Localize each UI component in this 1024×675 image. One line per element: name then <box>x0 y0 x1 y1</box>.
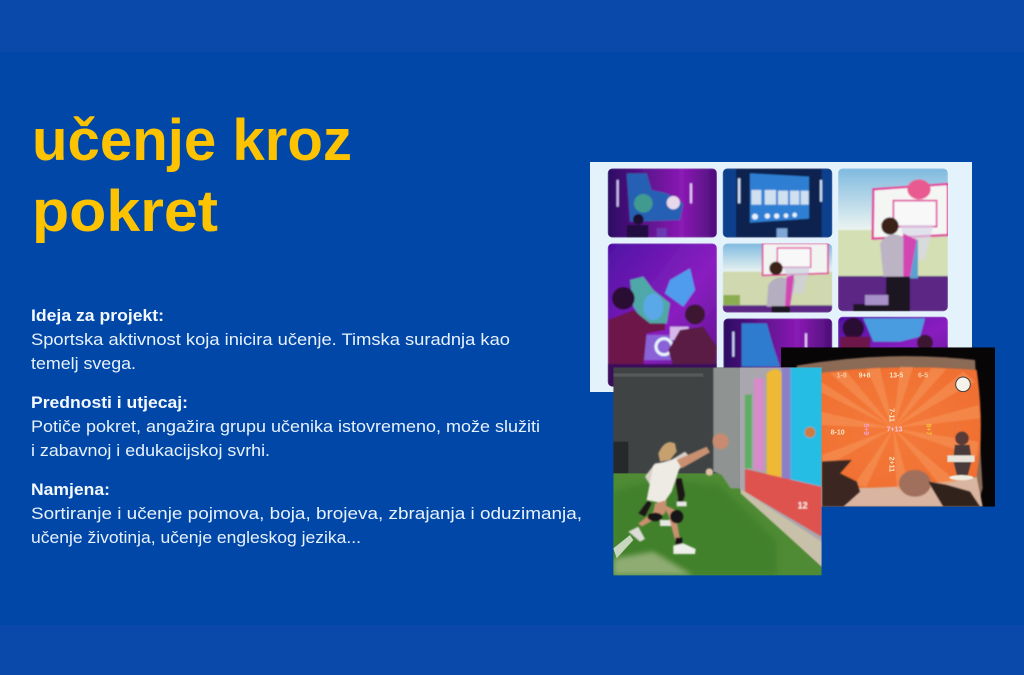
title <box>32 108 352 244</box>
text block: advantages and impact: Prednosti i utjecaj: <box>31 394 188 412</box>
photo: orange number game projection <box>781 347 995 507</box>
game numbers: 9+8 <box>859 373 871 380</box>
text block: purpose: Sortiranje i učenje pojmova, boja, brojeva, zbrajanja i oduzimanja, <box>31 504 582 523</box>
title: pokret <box>32 179 218 244</box>
text block: advantages and impact: i zabavnoj i edukacijskoj svrhi. <box>31 441 270 460</box>
curtain <box>713 367 742 488</box>
children silhouettes <box>822 460 980 507</box>
game numbers <box>831 373 932 472</box>
game numbers: 7-11 <box>887 408 894 422</box>
text block: project idea <box>31 307 510 373</box>
text block: advantages and impact: Potiče pokret, angažira grupu učenika istovremeno, može služiti <box>31 417 540 436</box>
photo: children throwing balls at projected wall <box>613 367 822 575</box>
photo collage: interactive wall grid <box>590 162 972 392</box>
game numbers: 8-10 <box>831 429 845 436</box>
projected wall <box>740 367 822 567</box>
title: učenje kroz <box>32 108 352 173</box>
game numbers: 2+11 <box>887 457 894 472</box>
game numbers: 6-5 <box>918 373 928 380</box>
photo: children throwing balls at projected wall: 12 <box>798 500 808 510</box>
text block: project idea: Ideja za projekt: <box>31 307 164 325</box>
text block: advantages and impact <box>31 394 540 460</box>
text block: purpose: učenje životinja, učenje engleskog jezika... <box>31 528 361 547</box>
game numbers: 8+7 <box>925 423 932 435</box>
text block: project idea: Sportska aktivnost koja inicira učenje. Timska suradnja kao <box>31 330 510 349</box>
clock <box>956 377 970 392</box>
floor <box>613 473 822 575</box>
text block: purpose: Namjena: <box>31 481 110 499</box>
text block: project idea: temelj svega. <box>31 354 136 373</box>
text block: purpose <box>31 481 582 547</box>
game numbers: 1-8 <box>837 373 847 380</box>
game numbers: 7+13 <box>887 427 903 434</box>
game numbers: 5+9 <box>862 423 869 435</box>
sunburst rays <box>820 367 980 489</box>
children in white shirts <box>628 433 729 554</box>
game numbers: 13-5 <box>889 373 903 380</box>
ninja character <box>947 432 975 480</box>
